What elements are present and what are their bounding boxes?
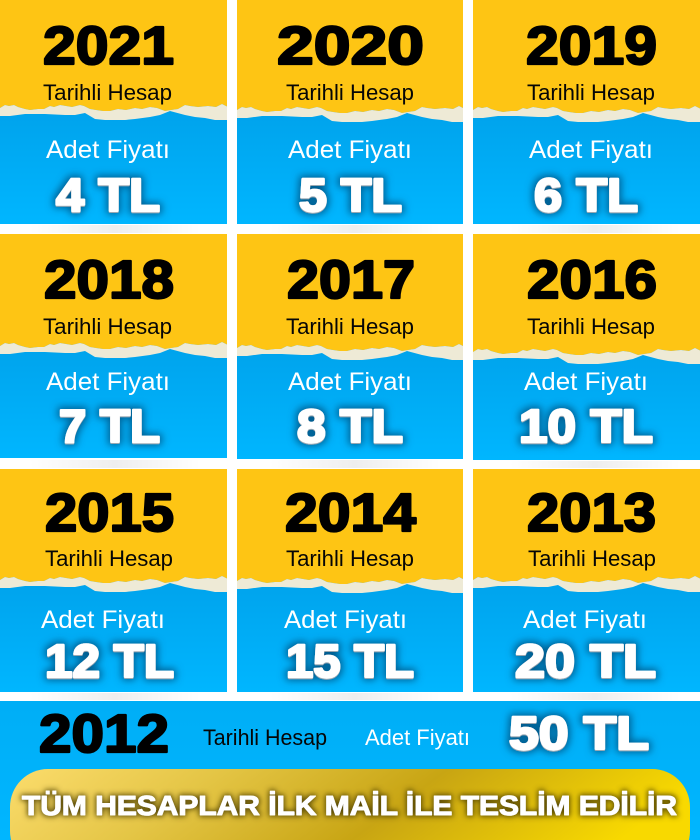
banner: delivery note	[10, 769, 690, 840]
price: 50 TL	[509, 707, 649, 759]
card: 2014	[237, 451, 465, 692]
unit price label: Adet Fiyatı	[288, 368, 412, 396]
unit price label: Adet Fiyatı	[41, 606, 165, 634]
label: Tarihli Hesap	[286, 80, 414, 105]
banner text: TÜM HESAPLAR İLK MAİL İLE TESLİM EDİLİR	[22, 790, 677, 821]
label: Tarihli Hesap	[527, 80, 655, 105]
price: 20 TL	[515, 635, 656, 687]
price: 10 TL	[519, 400, 653, 452]
unit price label: Adet Fiyatı	[288, 136, 412, 164]
panel: 2012 band	[0, 701, 700, 840]
card: 2020	[237, 0, 465, 224]
card: 2013	[473, 450, 700, 692]
price: 12 TL	[45, 635, 174, 687]
year 2015: 2015	[45, 483, 174, 543]
label: Tarihli Hesap	[286, 314, 414, 339]
label: Tarihli Hesap	[45, 546, 173, 571]
card: 2017	[237, 218, 465, 459]
card: 2018	[0, 216, 228, 458]
year 2019: 2019	[526, 16, 657, 76]
label: Tarihli Hesap	[528, 546, 656, 571]
card: 2016	[473, 222, 700, 460]
price: 5 TL	[299, 169, 402, 221]
unit price label: Adet Fiyatı	[529, 136, 653, 164]
price: 6 TL	[534, 169, 638, 221]
label: Tarihli Hesap	[203, 725, 327, 750]
unit price label: Adet Fiyatı	[523, 606, 647, 634]
label: Tarihli Hesap	[527, 314, 655, 339]
label: Tarihli Hesap	[286, 546, 414, 571]
year 2014: 2014	[285, 483, 416, 543]
label: Tarihli Hesap	[43, 80, 172, 105]
year 2016: 2016	[527, 250, 657, 310]
year 2017: 2017	[287, 250, 415, 310]
price: 8 TL	[297, 400, 403, 452]
price: 4 TL	[56, 169, 160, 221]
card: 2015	[0, 450, 228, 692]
year 2020: 2020	[277, 16, 424, 76]
year 2021: 2021	[43, 16, 174, 76]
year 2018: 2018	[44, 250, 174, 310]
year 2012: 2012	[39, 704, 169, 764]
price: 15 TL	[286, 635, 414, 687]
unit price label: Adet Fiyatı	[524, 368, 648, 396]
price: 7 TL	[59, 400, 160, 452]
unit price label: Adet Fiyatı	[46, 136, 170, 164]
unit price label: Adet Fiyatı	[46, 368, 170, 396]
unit price label: Adet Fiyatı	[365, 725, 470, 750]
year 2013: 2013	[527, 483, 656, 543]
label: Tarihli Hesap	[43, 314, 172, 339]
card: 2021	[0, 0, 228, 224]
unit price label: Adet Fiyatı	[284, 606, 407, 634]
card: 2019	[473, 0, 700, 224]
